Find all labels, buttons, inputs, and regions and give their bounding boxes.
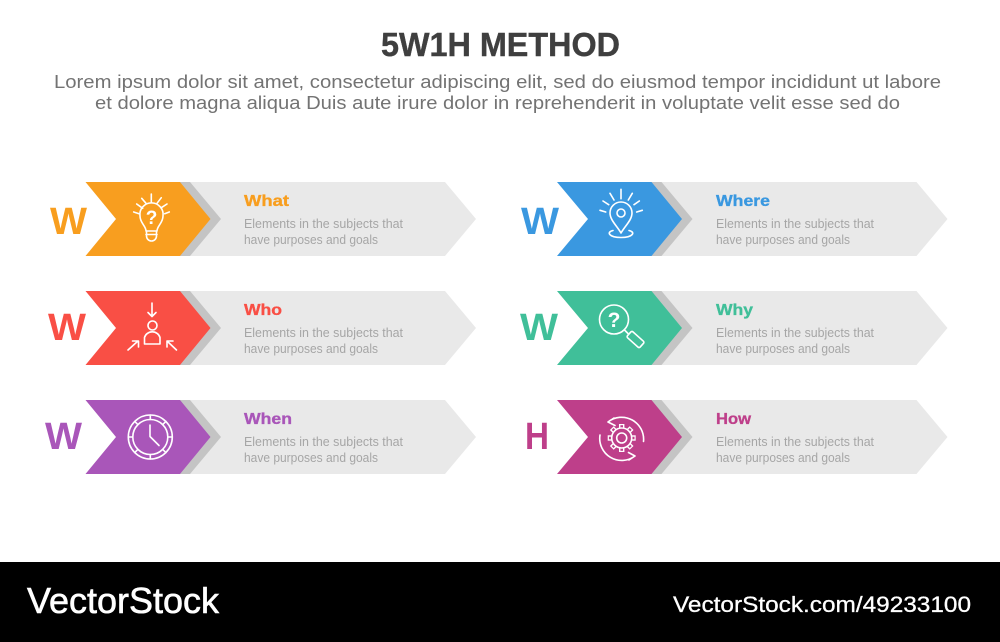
letter: W: W	[45, 416, 82, 458]
panel: why	[520, 291, 948, 365]
icon: person with arrows	[128, 303, 176, 350]
arrow: how	[557, 400, 682, 474]
letter: H: H	[525, 416, 549, 458]
icon: light bulb: ?	[146, 208, 157, 229]
letter: W: W	[521, 201, 559, 243]
arrow: where	[557, 182, 682, 256]
description	[244, 435, 404, 465]
arrow: what	[86, 182, 210, 256]
description	[716, 217, 875, 247]
icon: magnifier with question mark: ?	[608, 309, 620, 332]
letter: W: W	[520, 307, 558, 349]
icon: clock	[128, 415, 172, 459]
subtitle text block: Lorem ipsum dolor sit amet, consectetur adipiscing elit, sed do eiusmod tempor incididunt ut labore	[54, 72, 941, 92]
label: what: What	[244, 193, 290, 210]
icon: light bulb	[134, 194, 169, 241]
icon: location pin	[600, 189, 642, 238]
description: have purposes and goals	[716, 342, 850, 356]
description: have purposes and goals	[244, 451, 378, 465]
letter: W: W	[50, 201, 87, 243]
arrow: why	[557, 291, 682, 365]
icon: magnifier with question mark	[600, 305, 644, 348]
label: how: How	[716, 411, 752, 428]
description: have purposes and goals	[716, 451, 850, 465]
subtitle text block	[54, 72, 941, 113]
subtitle text block: et dolore magna aliqua Duis aute irure dolor in reprehenderit in voluptate velit esse sed do	[95, 93, 900, 113]
description: Elements in the subjects that	[716, 217, 875, 231]
description	[716, 326, 875, 356]
panel: who	[48, 291, 476, 365]
description: Elements in the subjects that	[244, 326, 404, 340]
description: Elements in the subjects that	[716, 435, 875, 449]
description	[716, 435, 875, 465]
arrow: who	[86, 291, 210, 365]
description	[244, 217, 404, 247]
label: why: Why	[716, 302, 753, 319]
description: Elements in the subjects that	[716, 326, 875, 340]
icon: gear with cycle arrows	[600, 417, 644, 460]
label: when: When	[244, 411, 292, 428]
panel: how	[525, 400, 948, 474]
panel: where	[521, 182, 948, 256]
letter: W: W	[48, 307, 86, 349]
footer logo: VectorStock	[27, 580, 220, 621]
label: who: Who	[244, 302, 282, 319]
footer bar	[0, 562, 1000, 642]
description: Elements in the subjects that	[244, 217, 404, 231]
footer url: VectorStock.com/49233100	[673, 592, 971, 617]
title: 5W1H METHOD	[381, 26, 620, 63]
arrow: when	[86, 400, 210, 474]
description: Elements in the subjects that	[244, 435, 404, 449]
label: where: Where	[716, 193, 770, 210]
description	[244, 326, 404, 356]
description: have purposes and goals	[716, 233, 850, 247]
panel: when	[45, 400, 476, 474]
description: have purposes and goals	[244, 342, 378, 356]
panel: what	[50, 182, 476, 256]
description: have purposes and goals	[244, 233, 378, 247]
